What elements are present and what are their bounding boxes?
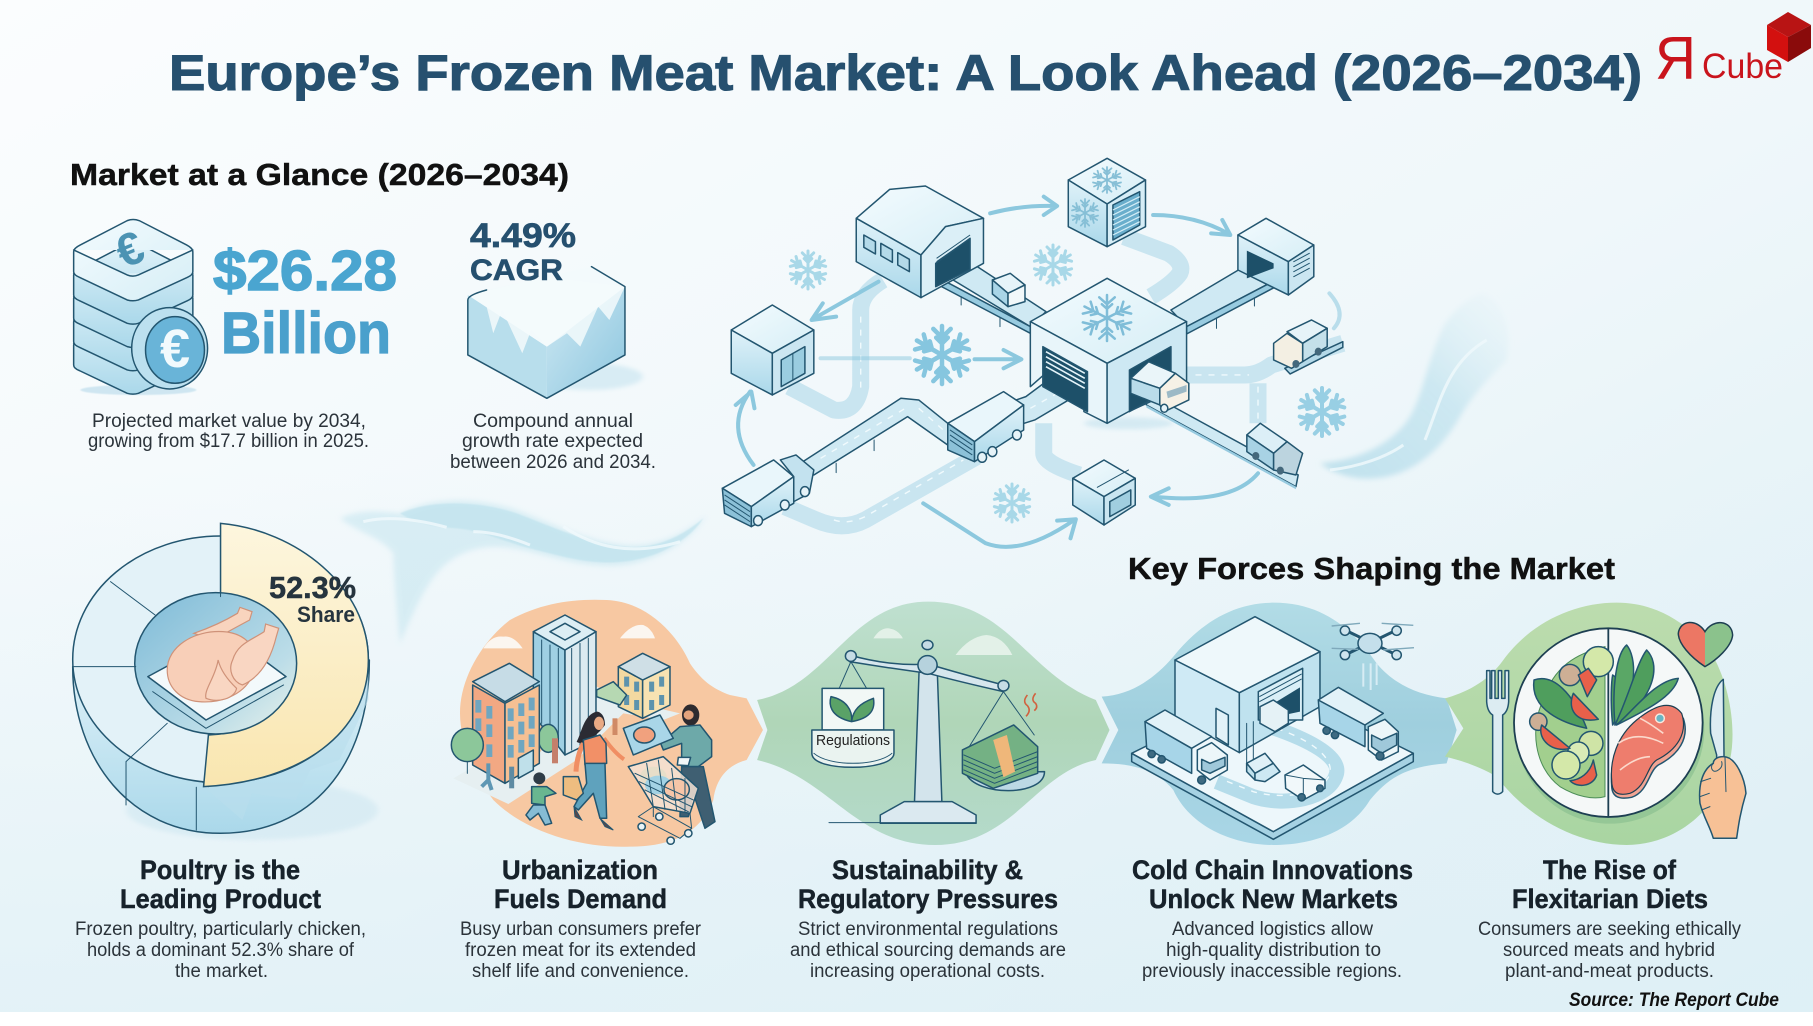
blob: green	[1445, 603, 1733, 845]
text: market value description	[88, 411, 369, 452]
text: urbanization description	[460, 919, 702, 982]
illustration: city shoppers	[451, 600, 763, 847]
icon: ice euro stack: €	[160, 319, 190, 379]
value: billion: Billion	[221, 301, 391, 366]
value: 4.49%: 4.49%	[470, 217, 576, 255]
fork	[1487, 671, 1509, 794]
panel: cold chain innovations	[1102, 603, 1457, 982]
logo letter: Я	[1655, 25, 1696, 92]
panel: cold chain network	[722, 158, 1346, 547]
decorative ice wave right	[1320, 293, 1508, 479]
illustration: cold chain hub	[1102, 603, 1457, 845]
yellow 52.3 slice	[204, 523, 368, 787]
text: sustainability description: Strict environmental regulations	[798, 919, 1058, 940]
van behind	[597, 682, 627, 705]
conveyor: lower right	[1146, 397, 1298, 489]
steak	[1611, 705, 1685, 798]
pavement	[453, 687, 680, 804]
donut side wall	[73, 660, 369, 833]
truck: at hub	[1131, 362, 1189, 412]
icon: ice cube	[468, 267, 643, 398]
title: Europe’s Frozen Meat Market: A Look Ahead (2026–2034)	[169, 45, 1642, 101]
illustration: scale	[757, 602, 1110, 845]
truck: right	[1318, 687, 1398, 760]
roads	[785, 237, 1343, 526]
text: CAGR description: between 2026 and 2034.	[450, 452, 656, 473]
left pan	[812, 662, 894, 767]
right pan money	[962, 692, 1045, 791]
truck: lower left	[722, 455, 814, 527]
conveyor: warehouse to hub	[937, 263, 1046, 333]
cube: cold store left	[731, 305, 814, 395]
text: CAGR description: Compound annual	[473, 411, 633, 432]
woman	[563, 712, 624, 830]
text: CAGR description: growth rate expected	[462, 431, 643, 452]
text: flexitarian description: plant-and-meat products.	[1505, 961, 1714, 982]
text: sustainability description: increasing operational costs.	[810, 961, 1045, 982]
icon: ice euro stack	[74, 219, 208, 395]
heading: flexitarian	[1512, 855, 1708, 914]
knife	[1710, 679, 1724, 787]
heading: cold chain	[1132, 855, 1413, 914]
plate shadow	[1516, 635, 1704, 824]
child	[526, 772, 556, 825]
box: distribution crate	[1073, 460, 1135, 525]
heading: key forces: Key Forces Shaping the Market	[1128, 551, 1615, 586]
building left	[473, 663, 539, 783]
text: sustainability description: and ethical sourcing demands are	[790, 940, 1066, 961]
donut top ring	[73, 536, 368, 783]
value: CAGR: CAGR	[470, 254, 563, 287]
icon: ice euro stack: €	[108, 220, 151, 278]
panel: urbanization	[451, 600, 763, 982]
text: poultry description: Frozen poultry, particularly chicken,	[75, 919, 366, 940]
tree	[451, 728, 483, 773]
text: cold chain description: previously inaccessible regions.	[1142, 961, 1402, 982]
meat package	[623, 715, 673, 755]
panel: CAGR	[450, 217, 656, 473]
inner well	[135, 593, 297, 734]
bush	[538, 724, 558, 752]
text: flexitarian description	[1478, 919, 1741, 982]
icon: snowflakes	[789, 167, 1346, 522]
text: cold chain description	[1142, 919, 1402, 982]
cube: cold store right	[1238, 218, 1314, 295]
tray	[148, 633, 286, 720]
heading: cold chain: Cold Chain Innovations	[1132, 855, 1413, 885]
hand	[1700, 757, 1746, 838]
text: CAGR description	[450, 411, 656, 473]
heading: urbanization	[494, 855, 667, 914]
cube: cold store top	[1068, 158, 1146, 247]
text: poultry description: holds a dominant 52.3% share of	[87, 940, 355, 961]
label: regulations: Regulations	[816, 733, 890, 749]
conveyor: lower left	[800, 373, 1088, 475]
decorative ice wave left	[340, 500, 707, 643]
platform	[1132, 683, 1413, 839]
heading: poultry: Poultry is the	[140, 855, 300, 885]
panel: poultry donut	[73, 523, 378, 982]
scale stand	[829, 640, 1009, 823]
salad	[1530, 647, 1613, 798]
illustration: plate	[1445, 603, 1746, 845]
blob: green	[757, 602, 1110, 845]
panel: sustainability	[757, 602, 1110, 982]
panel: market value	[74, 219, 397, 452]
drone	[1332, 623, 1414, 690]
text: sustainability description	[790, 919, 1066, 982]
text: flexitarian description: Consumers are seeking ethically	[1478, 919, 1741, 940]
source note: Source: The Report Cube	[1569, 990, 1779, 1011]
road	[1217, 727, 1337, 801]
text: cold chain description: Advanced logistics allow	[1172, 919, 1373, 940]
hub building	[1030, 278, 1187, 429]
pedestrians	[482, 718, 615, 790]
text: flexitarian description: sourced meats and hybrid	[1503, 940, 1715, 961]
text: urbanization description: shelf life and convenience.	[472, 961, 689, 982]
logo wordmark: Cube	[1702, 47, 1783, 86]
text: poultry description: the market.	[175, 961, 268, 982]
heading: sustainability: Regulatory Pressures	[798, 884, 1058, 914]
heart icon	[1678, 622, 1733, 667]
label: share: Share	[297, 602, 355, 627]
heading: sustainability	[798, 855, 1058, 914]
truck: lower right	[1247, 423, 1303, 475]
spinach leaves	[1611, 645, 1678, 725]
heading: sustainability: Sustainability &	[832, 855, 1023, 885]
inner truck	[1260, 700, 1288, 732]
heading: cold chain: Unlock New Markets	[1149, 884, 1398, 914]
text: poultry description	[75, 919, 366, 982]
conveyor: hub to right building	[1171, 265, 1276, 334]
plate	[1514, 628, 1703, 817]
heading: market at a glance: Market at a Glance (2026–2034)	[70, 157, 569, 192]
heading: urbanization: Fuels Demand	[494, 884, 667, 914]
clouds	[873, 628, 1012, 655]
heading: flexitarian: The Rise of	[1543, 855, 1677, 885]
van	[1285, 765, 1325, 801]
road under upper right truck	[1285, 342, 1343, 374]
truck: small by warehouse	[992, 273, 1025, 307]
warehouse: ice storage	[856, 186, 983, 298]
clouds	[483, 625, 655, 648]
blob: blue	[1102, 603, 1457, 845]
building right	[618, 653, 670, 718]
truck: upper right	[1274, 320, 1327, 368]
value: 26.28: $26.28	[213, 239, 397, 303]
heading: flexitarian: Flexitarian Diets	[1512, 884, 1708, 914]
text: market value description: growing from $17.7 billion in 2025.	[88, 431, 369, 452]
value: 52.3 percent: 52.3%	[269, 570, 356, 605]
logo cube	[1767, 12, 1811, 62]
forklift crates	[1247, 722, 1280, 782]
man	[661, 704, 715, 828]
building	[1175, 617, 1320, 753]
text: market value description: Projected market value by 2034,	[92, 411, 366, 432]
heading: urbanization: Urbanization	[502, 855, 658, 885]
chart: share donut	[73, 523, 378, 840]
blob: peach	[460, 600, 763, 847]
heading: poultry	[120, 855, 321, 914]
panel: flexitarian diets	[1445, 603, 1746, 982]
tower	[533, 615, 596, 755]
chicken	[167, 607, 279, 702]
arrows	[736, 197, 1340, 547]
truck: left	[1145, 710, 1227, 784]
text: cold chain description: high-quality distribution to	[1166, 940, 1381, 961]
shopping cart	[628, 757, 698, 844]
truck: middle	[948, 392, 1024, 462]
heading: poultry: Leading Product	[120, 884, 321, 914]
logo: Report Cube	[1655, 12, 1811, 92]
text: urbanization description: Busy urban consumers prefer	[460, 919, 702, 940]
text: urbanization description: frozen meat for its extended	[465, 940, 696, 961]
